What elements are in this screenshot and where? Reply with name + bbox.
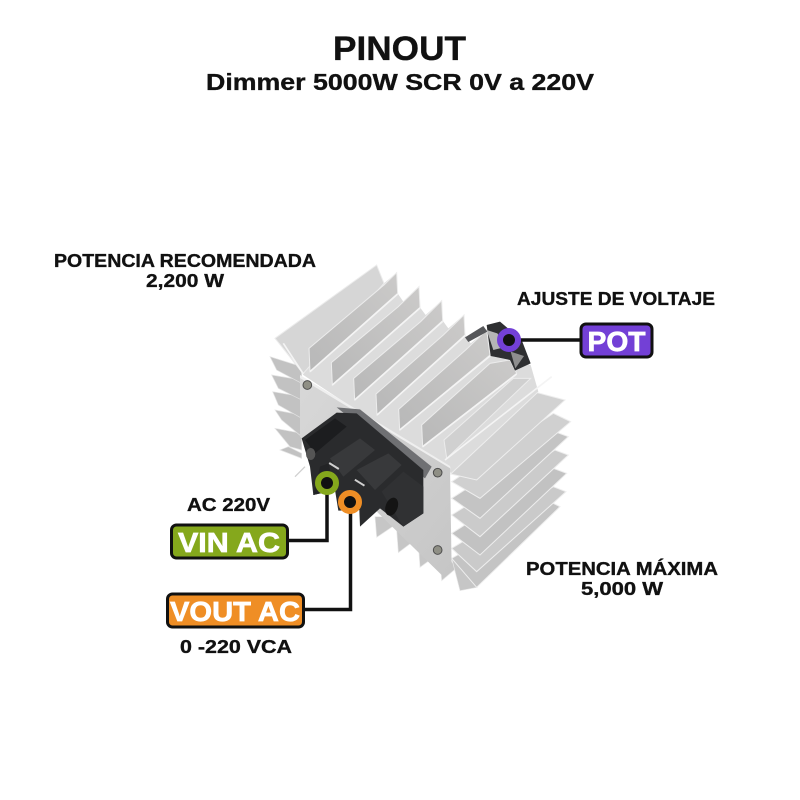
label: potencia maxima: 5,000 W [581,579,663,599]
subtitle: Dimmer 5000W SCR 0V a 220V [206,69,595,95]
badge: pot: POT [588,326,646,357]
upper body behind fins [275,265,538,473]
label: ajuste de voltaje: AJUSTE DE VOLTAJE [517,289,715,309]
right side fins [451,393,571,587]
bottom fins [295,467,477,591]
label: 0-220 vca: 0 -220 VCA [180,637,292,657]
badge: vout ac: VOUT AC [170,596,300,627]
label: potencia recomendada [54,251,316,291]
terminal leads [329,462,365,487]
label: ac 220v: AC 220V [187,495,270,515]
light ridges [283,294,552,460]
front plate [300,375,452,575]
connector: pot [500,331,580,349]
screws [303,381,442,554]
connector: vout ac [304,493,359,610]
label: potencia maxima: POTENCIA MÁXIMA [526,558,718,579]
printed text band on plate [337,407,432,478]
connector: vin ac [288,474,336,540]
title: PINOUT [333,30,466,68]
label: potencia maxima [526,558,718,599]
top fins [275,265,531,458]
terminal block [302,413,423,527]
label: potencia recomendada: 2,200 W [146,271,224,291]
left side fins [270,357,302,458]
dimmer module photo illustration [270,265,571,591]
potentiometer body [465,322,531,371]
label: potencia recomendada: POTENCIA RECOMENDADA [54,251,316,271]
badge: vin ac: VIN AC [178,527,280,558]
